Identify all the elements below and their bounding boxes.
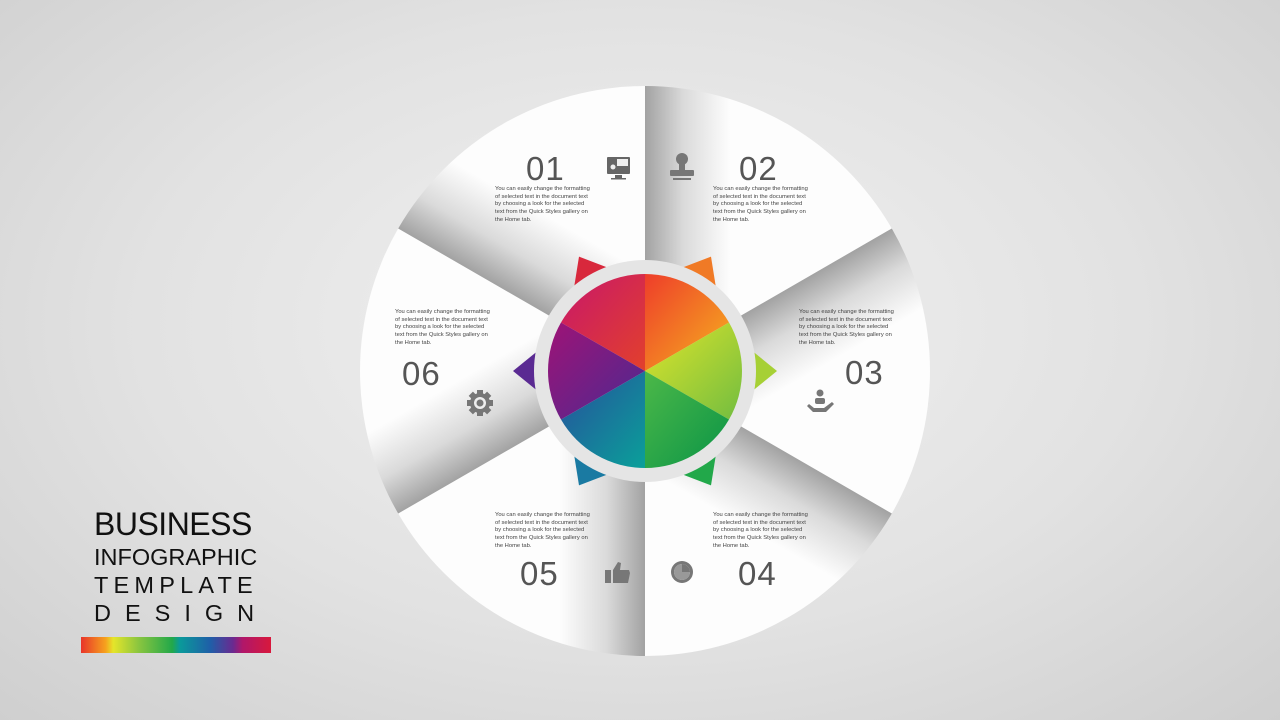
text 06: You can easily change the formatting bbox=[395, 309, 490, 315]
text 04: of selected text in the document text bbox=[713, 520, 806, 526]
icon: hand bbox=[807, 390, 834, 412]
text 04: the Home tab. bbox=[713, 543, 749, 549]
icon: stamp person bbox=[670, 153, 694, 180]
section 03 bbox=[799, 309, 894, 391]
text 03: You can easily change the formatting bbox=[799, 309, 894, 315]
text 04: by choosing a look for the selected bbox=[713, 527, 802, 533]
number 06: 06 bbox=[402, 355, 441, 392]
rainbow bar bbox=[81, 637, 271, 653]
number 04: 04 bbox=[738, 555, 777, 592]
text 05: You can easily change the formatting bbox=[495, 512, 590, 518]
title: TEMPLATE bbox=[94, 572, 258, 598]
star points bbox=[513, 244, 777, 498]
number 02: 02 bbox=[739, 150, 778, 187]
text 02: the Home tab. bbox=[713, 217, 749, 223]
section 04 bbox=[713, 512, 808, 592]
title: DESIGN bbox=[94, 600, 268, 626]
text 06: text from the Quick Styles gallery on bbox=[395, 332, 488, 338]
icon: monitor chat bbox=[607, 157, 630, 180]
outer sectors bbox=[275, 15, 1015, 720]
text 05 bbox=[495, 512, 590, 549]
text 04: You can easily change the formatting bbox=[713, 512, 808, 518]
text 04: text from the Quick Styles gallery on bbox=[713, 535, 806, 541]
title: INFOGRAPHIC bbox=[94, 544, 257, 570]
text 04 bbox=[713, 512, 808, 549]
text 02 bbox=[713, 186, 808, 223]
text 02: You can easily change the formatting bbox=[713, 186, 808, 192]
title bbox=[94, 506, 268, 626]
color wheel bbox=[548, 274, 742, 468]
text 06: of selected text in the document text bbox=[395, 317, 488, 323]
text 05: text from the Quick Styles gallery on bbox=[495, 535, 588, 541]
text 03: the Home tab. bbox=[799, 340, 835, 346]
text 02: of selected text in the document text bbox=[713, 194, 806, 200]
text 01: You can easily change the formatting bbox=[495, 186, 590, 192]
icon: thumbs up bbox=[605, 562, 630, 583]
text 01: the Home tab. bbox=[495, 217, 531, 223]
text 06 bbox=[395, 309, 490, 346]
number 01: 01 bbox=[526, 150, 565, 187]
grey ring bbox=[534, 260, 756, 482]
text 05: the Home tab. bbox=[495, 543, 531, 549]
number 03: 03 bbox=[845, 354, 884, 391]
text 03 bbox=[799, 309, 894, 346]
icon: gear bbox=[467, 390, 493, 416]
text 01 bbox=[495, 186, 590, 223]
text 01: text from the Quick Styles gallery on bbox=[495, 209, 588, 215]
section 05 bbox=[495, 512, 590, 592]
text 05: by choosing a look for the selected bbox=[495, 527, 584, 533]
title: BUSINESS bbox=[94, 506, 252, 542]
text 01: of selected text in the document text bbox=[495, 194, 588, 200]
text 01: by choosing a look for the selected bbox=[495, 201, 584, 207]
text 06: the Home tab. bbox=[395, 340, 431, 346]
icon: pie bbox=[671, 561, 693, 583]
text 03: text from the Quick Styles gallery on bbox=[799, 332, 892, 338]
section 02 bbox=[713, 150, 808, 223]
text 02: by choosing a look for the selected bbox=[713, 201, 802, 207]
text 02: text from the Quick Styles gallery on bbox=[713, 209, 806, 215]
text 03: of selected text in the document text bbox=[799, 317, 892, 323]
text 03: by choosing a look for the selected bbox=[799, 324, 888, 330]
text 05: of selected text in the document text bbox=[495, 520, 588, 526]
section 06 bbox=[395, 309, 490, 392]
text 06: by choosing a look for the selected bbox=[395, 324, 484, 330]
section 01 bbox=[495, 150, 590, 223]
number 05: 05 bbox=[520, 555, 559, 592]
